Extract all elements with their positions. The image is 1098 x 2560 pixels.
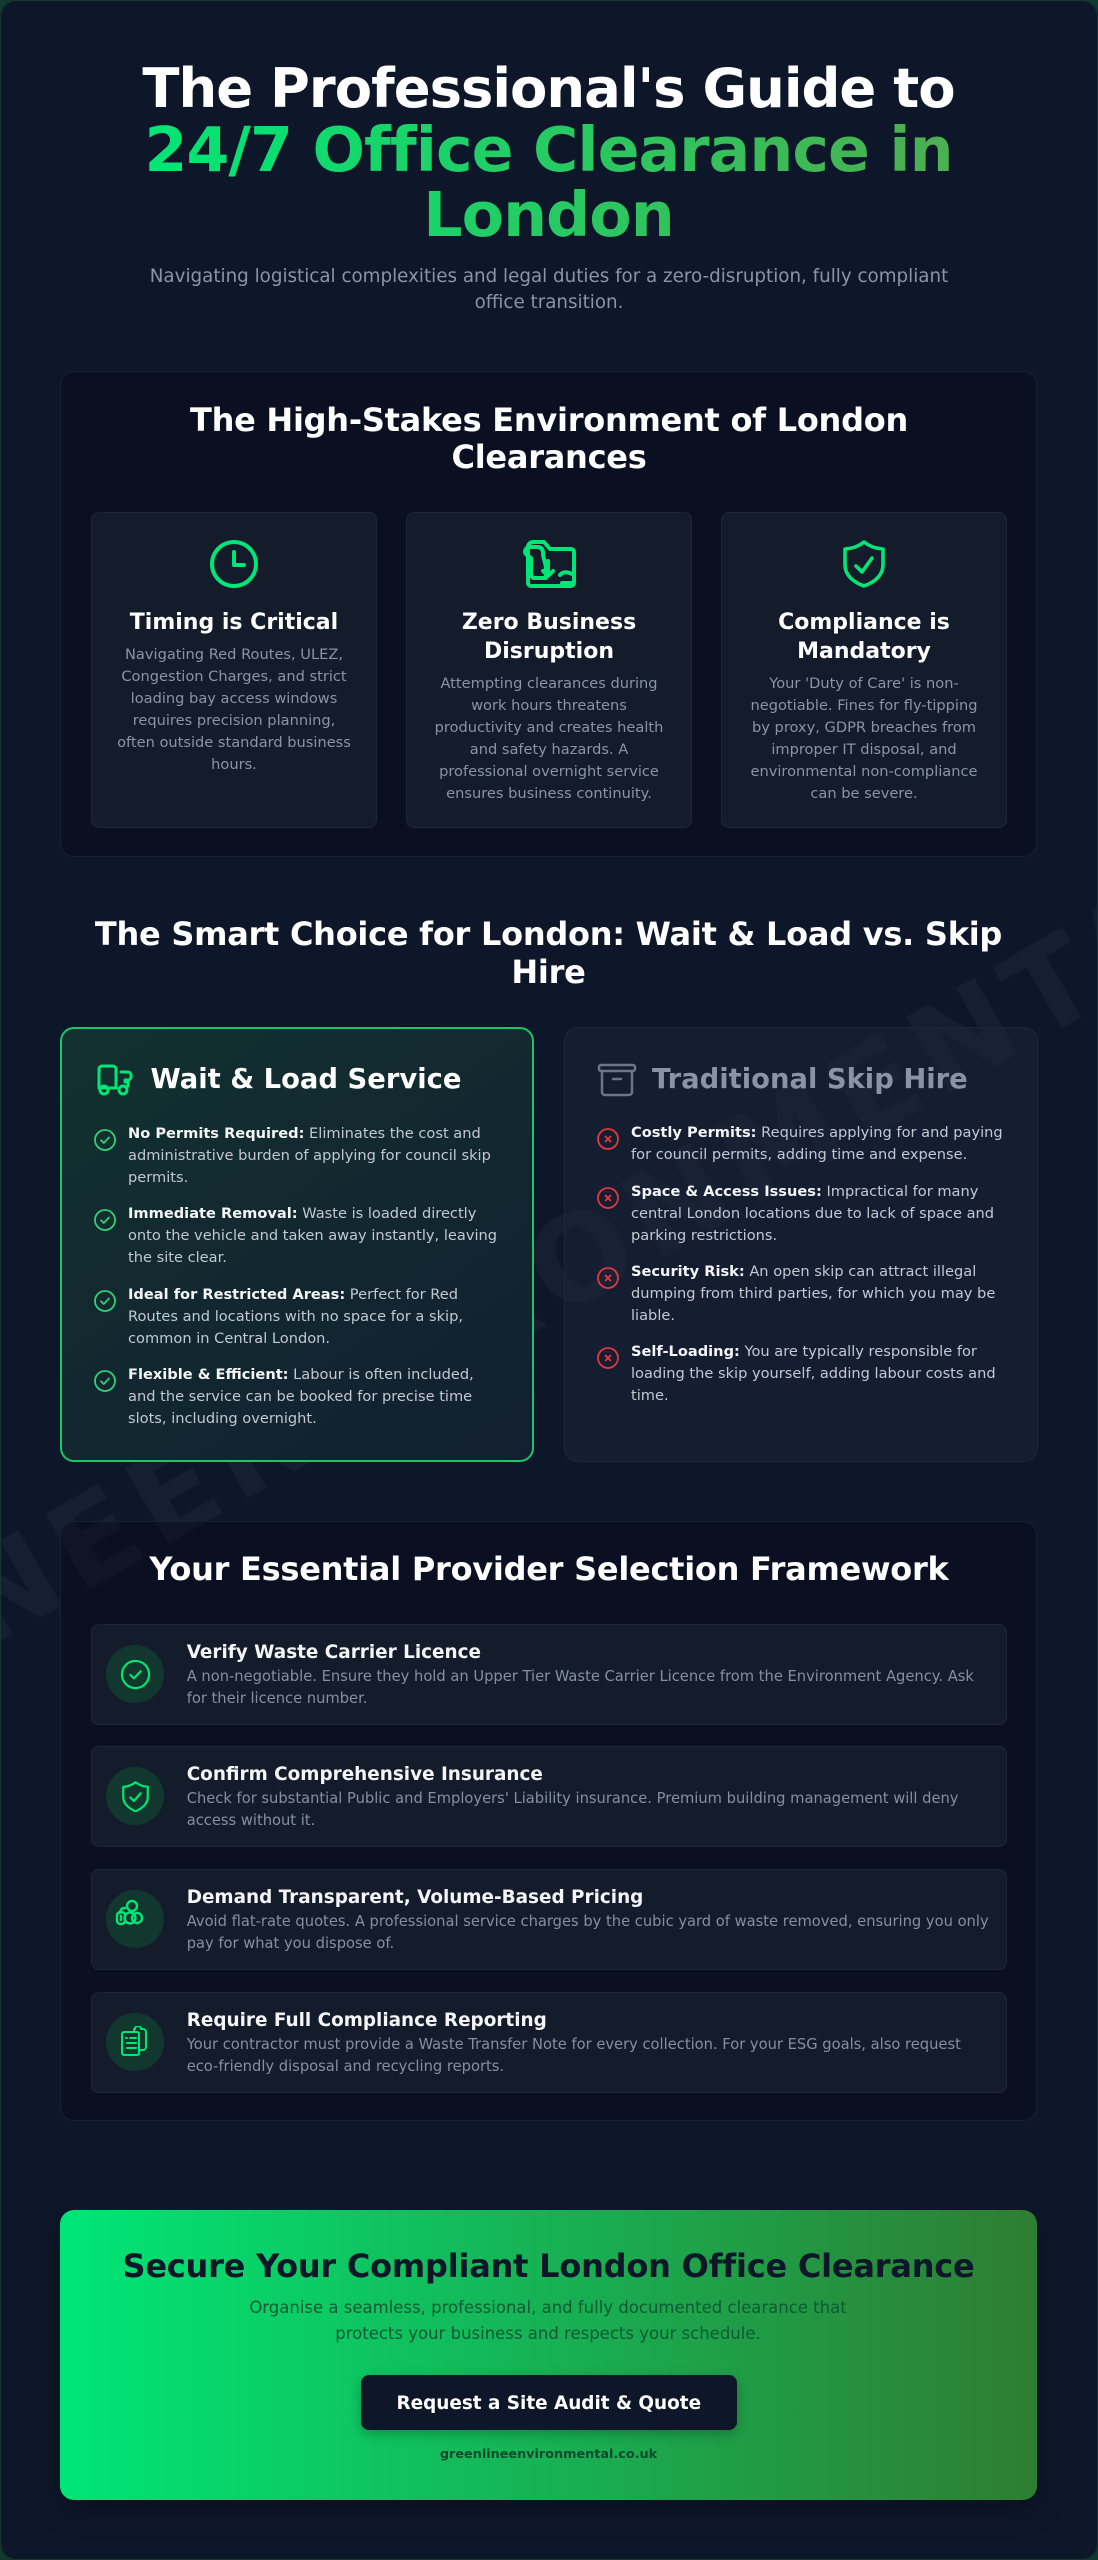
step text: Your contractor must provide a Waste Transfer Note for every collection. For your ESG goals, also request eco-friendly disposal and recycling reports. [187,2036,961,2075]
heading: high-stakes: The High-Stakes Environment of London Clearances [190,400,908,476]
card text: Your 'Duty of Care' is non-negotiable. Fines for fly-tipping by proxy, GDPR breaches from improper IT disposal, and environmental non-compliance can be severe. [750,675,978,802]
list item: Immediate Removal: Waste is loaded directly onto the vehicle and taken away instantly, leaving the site clear. [128,1205,497,1266]
list item: Security Risk: An open skip can attract illegal dumping from third parties, for which you may be liable. [631,1263,995,1324]
card heading: Timing is Critical [130,610,338,635]
icon: check badge [106,1645,164,1703]
card text: Attempting clearances during work hours threatens productivity and creates health and safety hazards. A professional overnight service ensures business continuity. [435,675,663,802]
panel heading: Wait & Load Service [150,1064,461,1095]
step text: Check for substantial Public and Employers' Liability insurance. Premium building management will deny access without it. [187,1790,958,1829]
step heading: Verify Waste Carrier Licence [187,1642,481,1663]
title: London [423,179,674,251]
card heading: Zero Business Disruption [462,610,636,664]
step: reporting [91,1992,1007,2093]
icon: clipboards [106,2013,164,2071]
cta button: Request a Site Audit & Quote [396,2393,701,2414]
icon: truck [98,1064,132,1096]
list item: Flexible & Efficient: Labour is often included, and the service can be booked for precise time slots, including overnight. [128,1366,474,1427]
heading: framework: Your Essential Provider Selection Framework [149,1550,949,1588]
step: pricing [91,1869,1007,1970]
list item: No Permits Required: Eliminates the cost and administrative burden of applying for council skip permits. [128,1125,491,1186]
card heading: Compliance is Mandatory [778,610,950,664]
panel heading: Traditional Skip Hire [652,1064,968,1094]
step: insurance [91,1746,1007,1847]
subtitle: Navigating logistical complexities and legal duties for a zero-disruption, fully compliant office transition. [150,266,948,313]
list item: Costly Permits: Requires applying for and paying for council permits, adding time and expense. [631,1124,1003,1163]
title: 24/7 Office Clearance in [144,114,953,186]
heading: smart choice: The Smart Choice for London: Wait & Load vs. Skip Hire [95,915,1002,990]
title: The Professional's Guide to [142,57,955,120]
call to action panel [60,2210,1037,2500]
cta text: Organise a seamless, professional, and fully documented clearance that protects your business and respects your schedule. [249,2298,847,2343]
icon: folder and transfer [523,540,576,588]
website: greenlineenvironmental.co.uk [440,2447,657,2462]
card: zero business disruption [406,512,692,828]
icon: shield check [843,540,885,588]
icon: clock [210,540,258,588]
list item: Ideal for Restricted Areas: Perfect for Red Routes and locations with no space for a skip, common in Central London. [128,1286,463,1347]
list item: Self-Loading: You are typically responsible for loading the skip yourself, adding labour costs and time. [631,1343,996,1404]
panel: high-stakes environment [60,371,1037,857]
icon: coins [106,1890,164,1948]
step heading: Confirm Comprehensive Insurance [187,1764,543,1785]
step heading: Demand Transparent, Volume-Based Pricing [187,1887,643,1908]
icon: shield check [106,1767,164,1825]
card: timing is critical [91,512,377,828]
panel: wait and load service [60,1027,534,1462]
list item: Space & Access Issues: Impractical for many central London locations due to lack of space and parking restrictions. [631,1183,994,1244]
title [142,57,955,251]
step: waste carrier licence [91,1624,1007,1725]
step text: A non-negotiable. Ensure they hold an Upper Tier Waste Carrier Licence from the Environment Agency. Ask for their licence number. [187,1668,974,1707]
step text: Avoid flat-rate quotes. A professional service charges by the cubic yard of waste removed, ensuring you only pay for what you dispose of. [187,1913,989,1952]
icon: archive box [598,1064,636,1096]
cta heading: Secure Your Compliant London Office Clearance [122,2247,974,2285]
card text: Navigating Red Routes, ULEZ, Congestion Charges, and strict loading bay access windows requires precision planning, often outside standard business hours. [117,646,351,773]
step heading: Require Full Compliance Reporting [187,2010,547,2031]
panel: provider selection framework [60,1521,1037,2121]
panel: traditional skip hire [564,1027,1038,1462]
card: compliance is mandatory [721,512,1007,828]
cta button [360,2375,737,2430]
